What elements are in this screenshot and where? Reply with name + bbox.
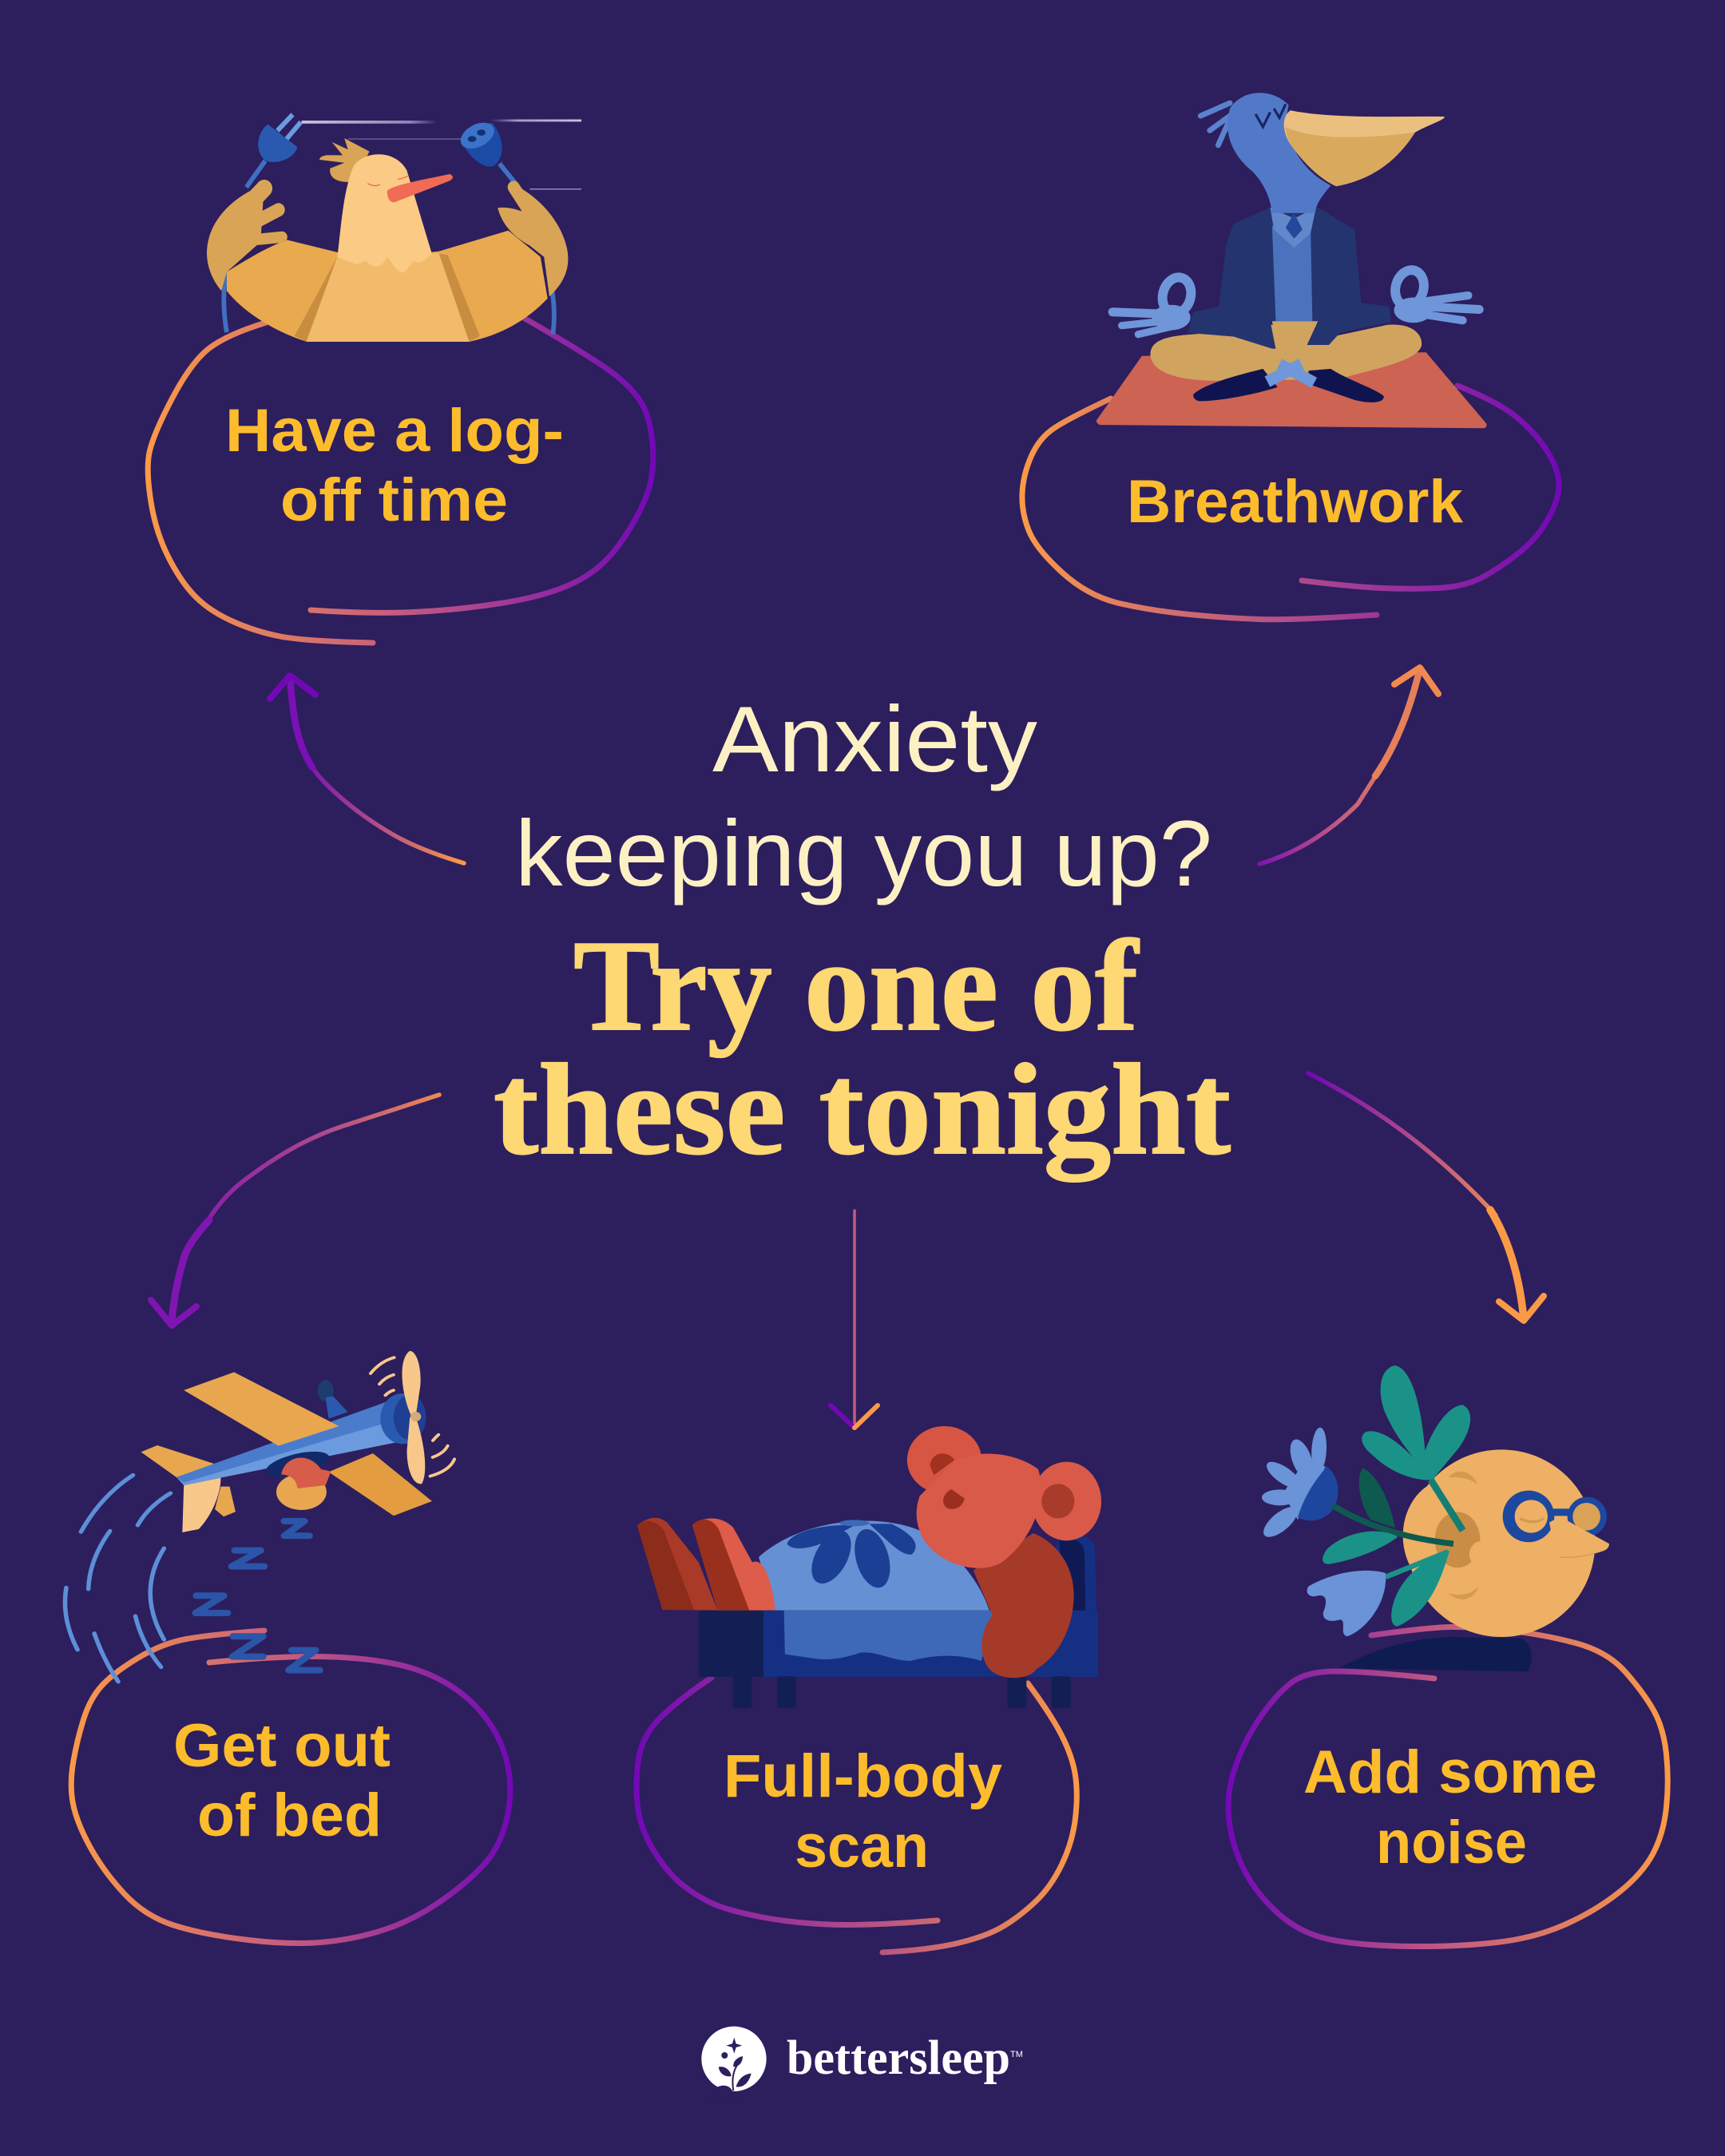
panel: get out of bed <box>65 1351 510 1944</box>
outline: full-body scan blob <box>636 1678 1077 1952</box>
arrow: to get out of bed <box>151 1095 439 1326</box>
logo wordmark: bettersleep <box>787 2031 1010 2085</box>
label: have a log-off time: Have a log- <box>225 397 564 465</box>
icon: bear lying in bed <box>637 1426 1101 1708</box>
trademark: TM <box>1010 2050 1023 2059</box>
heading: call to action: these tonight <box>494 1038 1231 1182</box>
label: get out of bed: Get out <box>173 1712 391 1780</box>
arrow: to full-body scan <box>831 1211 878 1428</box>
panel: add some noise <box>1228 1365 1668 1947</box>
icon: meditating pelican on a mat <box>1096 93 1487 428</box>
icon: moon with glasses and flowers <box>1259 1365 1609 1671</box>
panel: breathwork <box>1022 93 1559 620</box>
arrow: to breathwork <box>1259 668 1438 864</box>
panel: have a log-off time <box>148 114 653 643</box>
heading: question: keeping you up? <box>515 801 1212 906</box>
label: full-body scan: scan <box>795 1813 929 1881</box>
label: add some noise: noise <box>1376 1809 1527 1877</box>
icon: chicken pulling apart a plug <box>207 114 581 342</box>
label: breathwork: Breathwork <box>1127 468 1464 536</box>
logo: bettersleep <box>701 2027 1023 2098</box>
center message <box>494 687 1231 1182</box>
arrow: to add some noise <box>1308 1073 1544 1321</box>
label: full-body scan: Full-body <box>724 1742 1002 1810</box>
outline: log-off blob <box>148 317 653 643</box>
heading: question: Anxiety <box>712 687 1038 791</box>
outline: get out of bed blob <box>71 1631 510 1944</box>
label: get out of bed: of bed <box>197 1781 382 1849</box>
heading: call to action: Try one of <box>573 914 1140 1058</box>
icon: sleeping pilot in a plane <box>65 1351 454 1682</box>
outline: breathwork blob <box>1022 386 1559 620</box>
icon: logo mark <box>701 2027 767 2098</box>
arrow: to log-off time <box>270 676 464 863</box>
label: have a log-off time: off time <box>280 466 508 534</box>
outline: add some noise blob <box>1228 1627 1668 1947</box>
label: add some noise: Add some <box>1303 1738 1597 1806</box>
panel: full-body scan <box>636 1426 1101 1952</box>
